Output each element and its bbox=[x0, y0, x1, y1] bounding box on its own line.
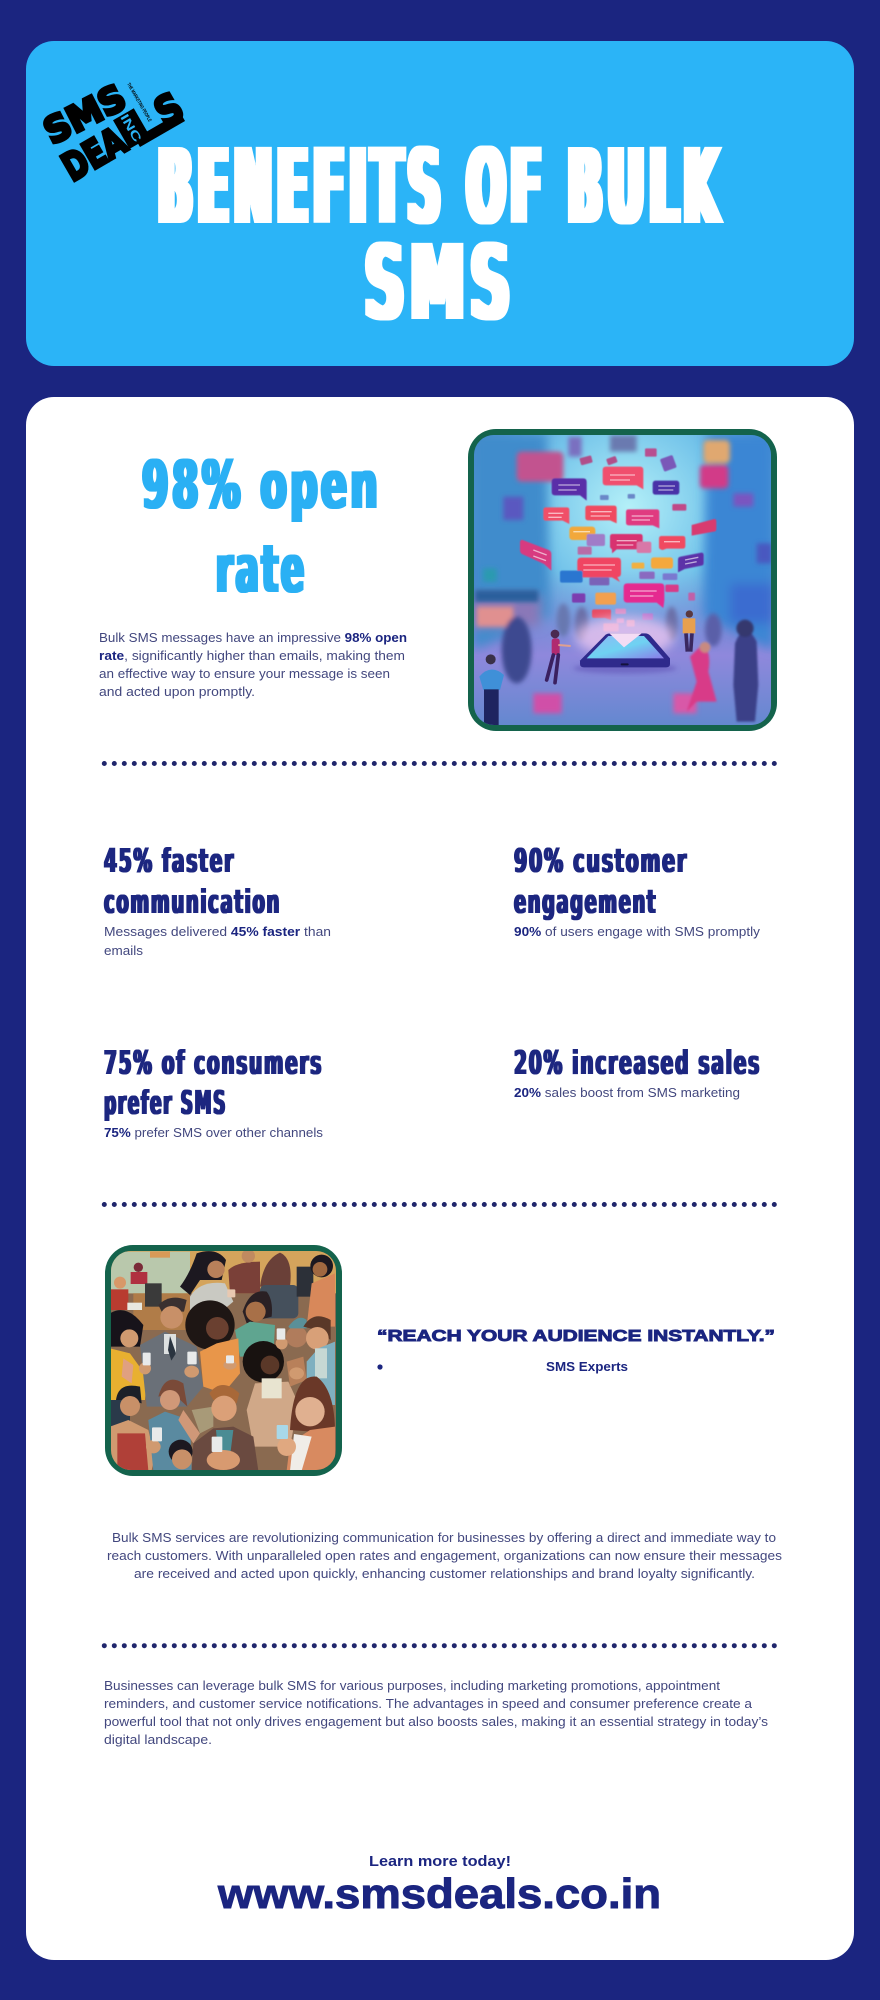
stat: 45% faster communication: Messages delivered 45% faster than bbox=[104, 924, 331, 939]
beanie girl + boy bbox=[286, 1328, 307, 1348]
ponytail woman bbox=[180, 1251, 226, 1295]
stat: 45% faster communication: 45% faster bbox=[104, 841, 235, 880]
title bbox=[158, 126, 724, 344]
text: open rate description bbox=[99, 630, 407, 699]
centre bag bbox=[192, 1407, 213, 1433]
stat: 45% faster communication bbox=[104, 841, 331, 958]
call to action: Learn more today! bbox=[369, 1853, 511, 1870]
text: summary paragraph: are received and acted upon quickly, enhancing customer relationships and brand loyalty significantly. bbox=[134, 1566, 755, 1581]
heading: 98% open rate: rate bbox=[216, 530, 307, 608]
logo: SMS Deals bbox=[37, 77, 192, 190]
text: uses paragraph: digital landscape. bbox=[104, 1732, 212, 1747]
text: open rate description: and acted upon promptly. bbox=[99, 684, 255, 699]
red woman in cafe bbox=[134, 1263, 143, 1272]
stat: 75% of consumers prefer SMS bbox=[104, 1043, 324, 1140]
woman yellow jacket bbox=[110, 1310, 143, 1347]
website url: www.smsdeals.co.in bbox=[217, 1870, 661, 1917]
person left in magenta bbox=[547, 630, 571, 683]
text: open rate description: an effective way to ensure your message is seen bbox=[99, 666, 390, 681]
header panel bbox=[26, 41, 854, 366]
text: uses paragraph bbox=[104, 1678, 769, 1747]
title: SMS bbox=[365, 222, 516, 344]
stat: 45% faster communication: emails bbox=[104, 943, 144, 958]
heading: 98% open rate bbox=[142, 446, 381, 608]
boy bottom bbox=[168, 1440, 193, 1460]
logo: SMS Deals: INC bbox=[117, 112, 145, 145]
quote attribution bbox=[377, 1359, 628, 1374]
text: uses paragraph: reminders, and customer service notifications. The advantages in speed and consumer preference create a bbox=[104, 1696, 753, 1711]
brown suit man bbox=[228, 1262, 260, 1293]
logo: SMS Deals: S bbox=[147, 84, 192, 137]
text: open rate description: rate, significantly higher than emails, making them bbox=[99, 648, 405, 663]
image: diverse crowd using phones bbox=[105, 1245, 343, 1476]
beard man bbox=[158, 1298, 187, 1312]
lower left woman bbox=[116, 1386, 142, 1403]
hands and forearms bbox=[139, 1337, 304, 1453]
phone bbox=[573, 633, 677, 674]
stat: 45% faster communication: communication bbox=[104, 882, 281, 921]
white content panel bbox=[26, 397, 854, 1960]
centre man bbox=[209, 1385, 239, 1403]
divider dots bbox=[104, 1643, 775, 1648]
stat: 75% of consumers prefer SMS: 75% of consumers bbox=[104, 1043, 323, 1082]
call to action bbox=[217, 1853, 661, 1917]
stat: 90% customer engagement: 90% customer bbox=[514, 841, 688, 880]
bubbles bbox=[520, 448, 716, 631]
bubble text lines bbox=[533, 475, 698, 596]
stat: 90% customer engagement: engagement bbox=[514, 882, 657, 921]
image: phone with message bubbles in a city street bbox=[468, 429, 777, 731]
glasses woman bbox=[158, 1380, 187, 1407]
stat: 90% customer engagement: 90% of users engage with SMS promptly bbox=[514, 924, 761, 939]
stat: 75% of consumers prefer SMS: 75% prefer SMS over other channels bbox=[104, 1125, 324, 1140]
stat: 20% increased sales bbox=[514, 1043, 761, 1100]
long hair woman bbox=[260, 1253, 291, 1287]
curly woman bbox=[243, 1341, 284, 1382]
woman right bottom bbox=[290, 1376, 335, 1433]
logo: SMS Deals: THE MARKETING PEOPLE bbox=[125, 82, 153, 124]
person left foreground blue bbox=[479, 654, 504, 726]
phones bbox=[143, 1289, 288, 1452]
quote attribution: SMS Experts bbox=[546, 1359, 628, 1374]
text: summary paragraph: reach customers. With unparalleled open rates and engagement, organizations can now ensure their messages bbox=[107, 1548, 783, 1563]
stat: 90% customer engagement bbox=[514, 841, 761, 939]
teal woman bbox=[243, 1291, 272, 1323]
divider dots bbox=[104, 1202, 775, 1207]
stat: 75% of consumers prefer SMS: prefer SMS bbox=[104, 1083, 227, 1122]
glow bbox=[575, 617, 675, 657]
heading: 98% open rate: 98% open bbox=[142, 446, 381, 524]
text: open rate description: Bulk SMS messages have an impressive 98% open bbox=[99, 630, 407, 645]
stat: 20% increased sales: 20% sales boost from SMS marketing bbox=[514, 1085, 740, 1100]
logo: SMS Deals: DEA bbox=[54, 118, 134, 190]
quote: “REACH YOUR AUDIENCE INSTANTLY.” bbox=[377, 1328, 775, 1345]
divider dots bbox=[104, 761, 775, 766]
logo: SMS Deals: SMS bbox=[37, 77, 133, 153]
quote bbox=[377, 1328, 775, 1374]
text: summary paragraph bbox=[107, 1530, 783, 1581]
person right with orange vest bbox=[683, 610, 695, 652]
text: uses paragraph: powerful tool that not only drives engagement but also boosts sales, making it an essential strategy in today’s bbox=[104, 1714, 769, 1729]
afro woman bbox=[185, 1300, 235, 1350]
woman far right bbox=[297, 1267, 313, 1297]
text: summary paragraph: Bulk SMS services are revolutionizing communication for businesses by offering a direct and immediate way to bbox=[112, 1530, 776, 1545]
text: uses paragraph: Businesses can leverage bulk SMS for various purposes, including marketing promotions, appointment bbox=[104, 1678, 720, 1693]
